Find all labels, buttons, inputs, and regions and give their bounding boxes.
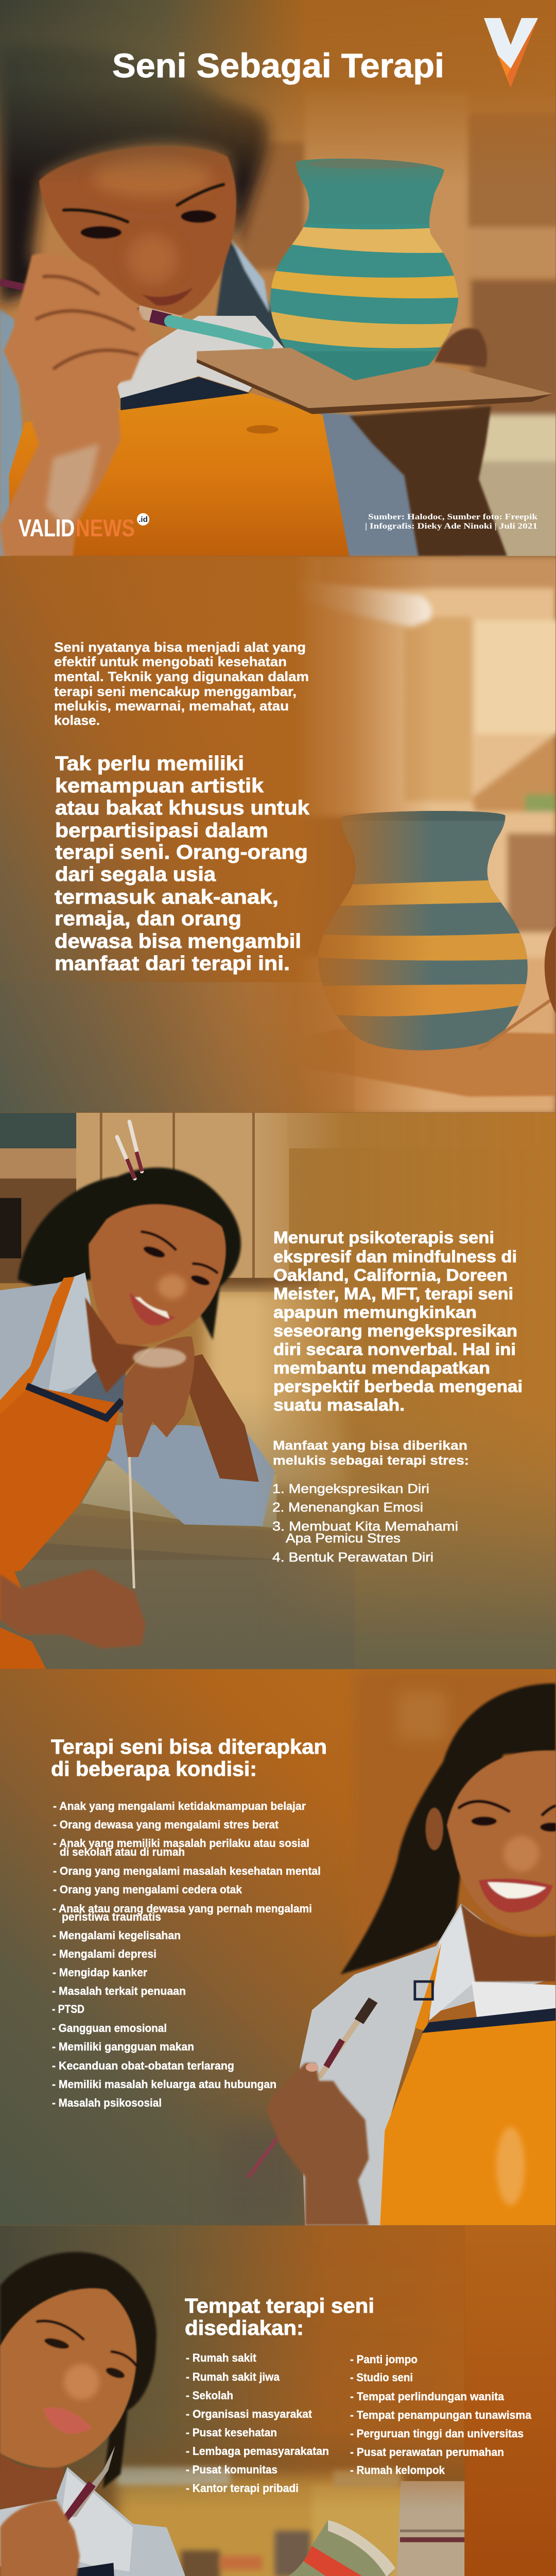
top gradient wash [0,0,556,184]
face [39,146,236,316]
red and green vase [241,2517,404,2576]
conditions list: - Anak atau orang dewasa yang pernah mengalami [53,1902,312,1915]
conditions list: - Masalah psikososial [52,2096,162,2109]
hand holding brush [266,2063,369,2225]
conditions list: di sekolah atau di rumah [60,1845,185,1858]
hair [0,2252,157,2488]
places list: left column: - Pusat komunitas [186,2463,277,2476]
hair [18,1167,241,1340]
conditions heading: di beberapa kondisi: [51,1758,257,1781]
places heading: disediakan: [185,2317,304,2340]
expert quote paragraph: apapun memungkinkan [273,1303,477,1321]
expert quote paragraph: Oakland, California, Doreen [273,1266,508,1284]
right orange wash [0,1113,556,1669]
conditions list: peristiwa traumatis [62,1910,161,1923]
intro paragraph [54,639,309,728]
logo: Validnews wordmark [19,513,149,541]
benefits list: 1. Mengekspresikan Diri [272,1482,429,1496]
places list: left column: - Kantor terapi pribadi [186,2482,299,2495]
expert quote paragraph: seseorang mengekspresikan [273,1321,517,1340]
photo: smiling woman leaning on a counter [0,1113,556,1669]
right hand holding the board [349,328,507,556]
benefits list: 3. Membuat Kita Memahami [272,1519,458,1534]
emphasis paragraph: atau bakat khusus untuk [55,797,309,819]
shirt [0,2467,229,2576]
emphasis paragraph: berpartisipasi dalam [55,820,268,842]
benefits subheading: Manfaat yang bisa diberikan [273,1438,467,1453]
striped curtain [388,2481,464,2576]
conditions list: - Anak yang mengalami ketidakmampuan belajar [53,1800,306,1812]
conditions list: - PTSD [52,2003,84,2015]
shirt [300,1904,555,2225]
conditions list: - Mengalami depresi [53,1947,157,1960]
expert quote paragraph: suatu masalah. [273,1396,405,1414]
panel: expert quote and benefits [0,1113,556,1669]
places list: right column: - Perguruan tinggi dan universitas [350,2427,524,2440]
places list: right column: - Pusat perawatan perumahan [350,2446,504,2459]
wooden stick and clay at right [479,925,556,1049]
orange strip at right [464,2226,556,2576]
conditions list: - Mengalami kegelisahan [53,1929,181,1942]
emphasis paragraph: termasuk anak-anak, [55,886,279,908]
emphasis paragraph: terapi seni. Orang-orang [55,841,308,863]
places list: right column: - Tempat perlindungan wanita [350,2390,505,2403]
expert quote paragraph: membantu mendapatkan [273,1359,490,1377]
places list: left column [186,2351,329,2495]
logo: Validnews wordmark: VALID [19,514,75,541]
intro paragraph: efektif untuk mengobati kesehatan [54,654,287,669]
places list: right column: - Rumah kelompok [350,2464,445,2477]
conditions list [52,1800,321,2109]
conditions list: - Orang yang mengalami cedera otak [53,1883,242,1896]
gradient background [0,1669,556,2226]
benefits list: Apa Pemicu Stres [286,1531,401,1546]
places list: left column: - Rumah sakit jiwa [186,2370,280,2383]
lower hand [0,1569,145,1649]
logo: V mark [484,18,538,88]
places list: left column: - Organisasi masyarakat [186,2408,312,2420]
studio background [0,2226,555,2576]
face [0,2288,136,2510]
benefits subheading: melukis sebagai terapi stres: [273,1453,469,1468]
orange gradient wash [0,556,556,1113]
logo: Validnews wordmark: .id [138,515,148,524]
expert quote paragraph: ekspresif dan mindfulness di [273,1247,517,1266]
source credit [365,513,537,531]
panel: what art therapy is [0,556,556,1113]
intro paragraph: mental. Teknik yang digunakan dalam [54,669,309,684]
places list: right column [350,2353,532,2477]
conditions list: - Memiliki masalah keluarga atau hubungan [52,2078,276,2091]
blurred studio background [0,0,556,564]
intro paragraph: terapi seni mencakup menggambar, [54,684,297,699]
brush [248,1997,378,2177]
panel: conditions that benefit [0,1669,556,2226]
expert quote paragraph: Meister, MA, MFT, terapi seni [273,1284,513,1303]
vase striped teal and yellow [263,152,468,387]
conditions list: - Mengidap kanker [53,1966,147,1979]
places heading: Tempat terapi seni [185,2295,374,2317]
expert quote paragraph [273,1228,523,1414]
emphasis paragraph: manfaat dari terapi ini. [55,953,290,975]
places list: left column: - Lembaga pemasyarakatan [186,2445,329,2458]
places list: left column: - Sekolah [186,2389,233,2402]
wooden board [197,348,553,414]
expert quote paragraph: Menurut psikoterapis seni [273,1228,494,1247]
intro paragraph: kolase. [54,713,100,728]
vase slate and orange stripes [312,805,532,1053]
blurred room background [0,556,556,1113]
panel: intro photo of woman painting a vase [0,0,556,564]
arm and hand [123,1336,259,1482]
places list: right column: - Panti jompo [350,2353,418,2366]
emphasis paragraph: dari segala usia [55,863,216,886]
conditions list: - Anak yang memiliki masalah perilaku atau sosial [53,1837,309,1850]
apron neck band and tee [117,316,284,434]
expert quote paragraph: perspektif berbeda mengenai [273,1377,523,1396]
benefits subheading [273,1438,469,1468]
benefits list [272,1482,458,1565]
wooden board [227,1028,556,1096]
conditions list: - Kecanduan obat-obatan terlarang [52,2059,234,2072]
places list: left column: - Rumah sakit [186,2351,257,2364]
benefits list: 2. Menenangkan Emosi [272,1500,423,1515]
places list: right column: - Tempat penampungan tunawisma [350,2409,532,2421]
places heading [185,2295,374,2340]
apron [380,1942,555,2225]
shirt [0,1273,275,1526]
apron [9,392,349,556]
conditions heading [51,1736,327,1781]
photo: thoughtful woman holding a red vase [0,2226,556,2576]
painting hand and arm [0,253,152,556]
photo: woman with brush at right [0,1669,556,2226]
ceiling light streak [269,576,431,628]
places list: left column: - Pusat kesehatan [186,2426,277,2439]
source credit: | Infografis: Dieky Ade Ninoki | Juli 2021 [365,522,537,531]
logo: Validnews wordmark: NEWS [76,514,135,541]
conditions list: - Orang dewasa yang mengalami stres berat [53,1818,279,1831]
apron [0,2563,145,2576]
face [85,1204,226,1393]
title: Seni Sebagai Terapi [112,46,444,84]
conditions list: - Masalah terkait penuaan [52,1985,186,1997]
lower olive wash [0,1113,556,1669]
expert quote paragraph: diri secara nonverbal. Hal ini [273,1340,516,1359]
emphasis paragraph [55,753,309,975]
hair [340,1684,556,1974]
conditions list: - Orang yang mengalami masalah kesehatan mental [53,1865,321,1877]
hair [0,44,268,305]
brush [0,282,268,344]
emphasis paragraph: Tak perlu memiliki [55,753,244,775]
conditions list: - Gangguan emosional [52,2022,167,2035]
conditions list: - Memiliki gangguan makan [52,2040,194,2053]
apron [0,1277,123,1669]
panel: places offering art therapy [0,2226,556,2576]
paint brushes in hair [117,1122,142,1178]
long brush [129,1457,134,1588]
emphasis paragraph: remaja, dan orang [55,908,241,930]
conditions heading: Terapi seni bisa diterapkan [51,1736,327,1758]
photo: painter and striped vase [0,0,556,564]
emphasis paragraph: kemampuan artistik [55,775,264,797]
shirt [0,238,420,556]
intro paragraph: melukis, mewarnai, memahat, atau [54,698,289,714]
top gradient wash [0,2226,464,2510]
intro paragraph: Seni nyatanya bisa menjadi alat yang [54,639,306,655]
places list: right column: - Studio seni [350,2371,413,2384]
photo: striped vase on a board [0,556,556,1113]
benefits list: 4. Bentuk Perawatan Diri [272,1550,433,1565]
source credit: Sumber: Halodoc, Sumber foto: Freepik [368,513,537,521]
face [426,1751,556,1981]
left hand with pen brush [0,2446,115,2576]
studio background with cabinets [0,1113,556,1669]
emphasis paragraph: dewasa bisa mengambil [55,930,301,953]
